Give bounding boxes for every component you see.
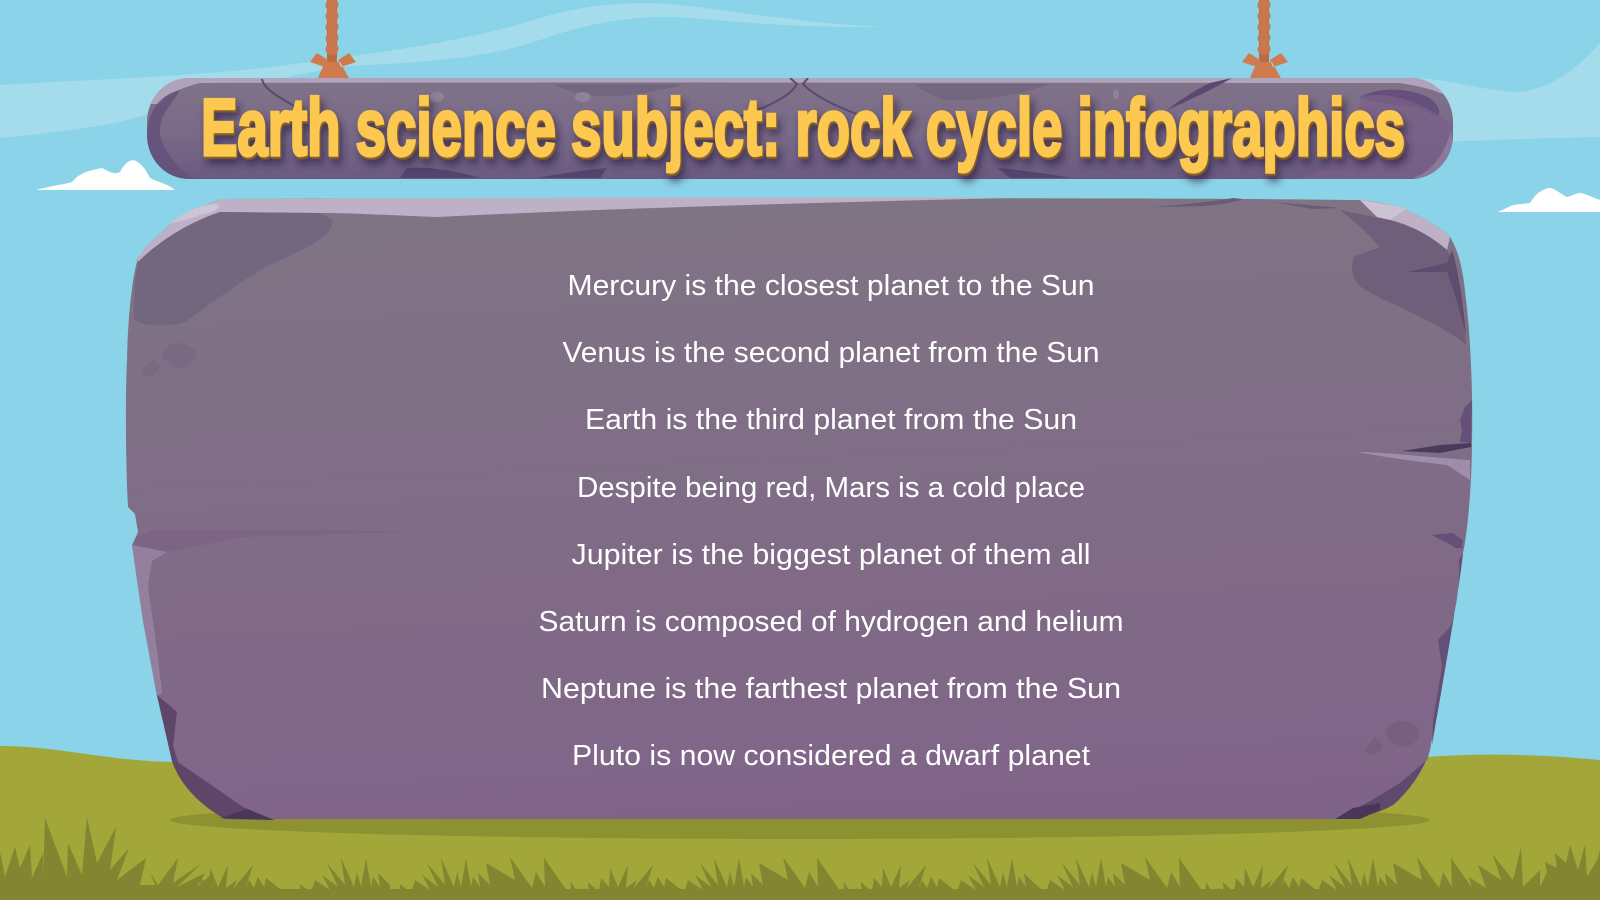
stone corner shade right bbox=[1335, 750, 1430, 819]
rope right bbox=[1242, 0, 1288, 80]
stone corner shade left bbox=[157, 695, 275, 820]
rope left bbox=[310, 0, 356, 80]
stone left seam bbox=[133, 530, 410, 552]
stone cracks right bbox=[1357, 452, 1470, 480]
sky wave right bbox=[1420, 43, 1600, 142]
sky wave left bbox=[0, 3, 882, 138]
fact: Mercury: Mercury is the closest planet to the Sun bbox=[568, 270, 1094, 302]
fact: Venus: Venus is the second planet from the Sun bbox=[562, 337, 1100, 369]
grass blades bbox=[0, 817, 1600, 900]
stone shade upper left bbox=[134, 212, 332, 326]
stone right edge shade bbox=[1432, 553, 1463, 745]
fact: Neptune: Neptune is the farthest planet from the Sun bbox=[541, 673, 1121, 705]
stone left highlight bbox=[132, 545, 167, 696]
stone thin top cracks bbox=[1150, 198, 1340, 209]
planet facts list bbox=[538, 270, 1124, 772]
fact: Mars: Despite being red, Mars is a cold place bbox=[577, 472, 1085, 504]
fact: Earth: Earth is the third planet from the Sun bbox=[585, 404, 1077, 436]
stone shade upper right bbox=[1340, 210, 1466, 345]
fact: Pluto: Pluto is now considered a dwarf planet bbox=[572, 740, 1090, 772]
stone dark crack upper right bbox=[1407, 250, 1466, 335]
stone ground shadow bbox=[170, 801, 1430, 839]
stone bright patch left bbox=[170, 204, 219, 223]
stone upper fissure shade bbox=[1460, 400, 1472, 443]
stone top highlight bbox=[138, 198, 1010, 262]
stone right highlight bbox=[1360, 200, 1450, 250]
stone dark fissure right bbox=[1402, 443, 1471, 453]
grass hill bbox=[0, 746, 1600, 900]
stone corner dark left bbox=[220, 809, 273, 820]
title plank bbox=[140, 78, 1460, 179]
cloud right bbox=[1498, 188, 1600, 212]
cloud left bbox=[36, 160, 175, 190]
fact: Jupiter: Jupiter is the biggest planet of them all bbox=[572, 539, 1090, 571]
stone chip right bbox=[1432, 533, 1463, 548]
pebbles left bbox=[142, 343, 197, 377]
pebbles right bbox=[1365, 721, 1420, 755]
main stone panel bbox=[126, 198, 1472, 820]
fact: Saturn: Saturn is composed of hydrogen and helium bbox=[538, 606, 1124, 638]
stone bright patch right bbox=[1360, 200, 1407, 220]
stone corner dark right bbox=[1335, 803, 1380, 819]
